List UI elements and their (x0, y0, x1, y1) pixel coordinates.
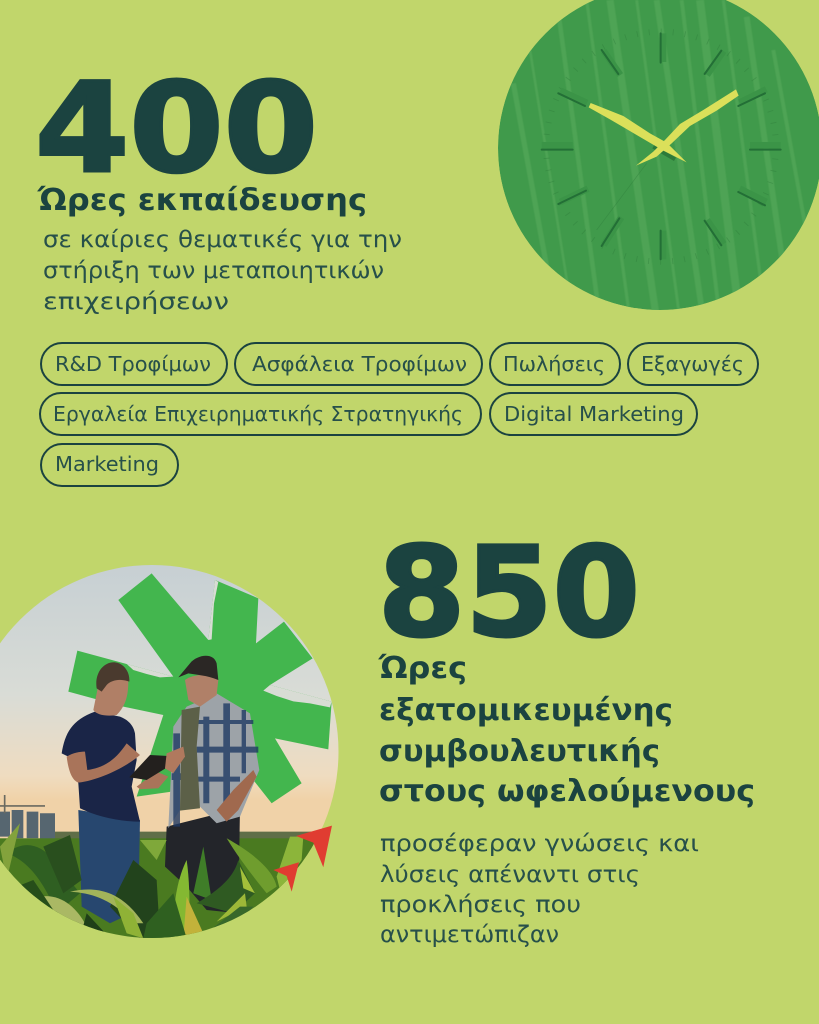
text block: consulting description: προσέφεραν γνώσεις και (380, 831, 699, 857)
icon: clock hands (589, 89, 739, 166)
icon: clock (498, 0, 819, 320)
silos (0, 810, 55, 840)
tag: R&D (41, 343, 227, 385)
text block: consulting description: λύσεις απέναντι στις (380, 862, 640, 888)
text block: consulting description: προκλήσεις που (380, 892, 581, 918)
text block: training description: σε καίριες θεματικές για την (43, 227, 402, 253)
heading: training hours: Ώρες εκπαίδευσης (37, 183, 367, 218)
panel: topic tags (40, 343, 758, 486)
tag: digital marketing (490, 393, 697, 435)
tag: strategy tools (40, 393, 481, 435)
text block: consulting description (380, 831, 699, 948)
tablet (130, 755, 166, 780)
heading: 400: 400 (35, 57, 318, 201)
tag: digital marketing: Digital Marketing (504, 402, 684, 426)
text block: consulting description: αντιμετώπιζαν (380, 922, 559, 948)
icon: red arrows (273, 826, 332, 892)
heading: consulting hours: Ώρες (378, 651, 467, 686)
photo: farmers in corn field (0, 560, 360, 945)
text block: training description (43, 227, 402, 315)
heading: consulting hours: συμβουλευτικής (379, 734, 660, 769)
heading: consulting hours (378, 651, 755, 809)
man one (62, 662, 168, 923)
icon: green asterisk (68, 573, 332, 803)
tag: exports: Εξαγωγές (641, 352, 744, 376)
heading: consulting hours: εξατομικευμένης (379, 693, 673, 728)
tag: food safety (235, 343, 482, 385)
text block: training description: επιχειρήσεων (43, 289, 229, 315)
text block: training description: στήριξη των μεταποιητικών (43, 258, 384, 284)
heading: consulting hours: στους ωφελούμενους (379, 774, 755, 809)
tag: sales: Πωλήσεις (503, 352, 605, 376)
tag: exports (628, 343, 758, 385)
tag: marketing: Marketing (55, 452, 159, 476)
tag: sales (490, 343, 620, 385)
corn leaves (0, 823, 303, 938)
man two (165, 656, 259, 913)
tag: strategy tools: Εργαλεία Επιχειρηματικής Στρατηγικής (53, 402, 463, 426)
tag: R&D: R&D Τροφίμων (55, 352, 211, 376)
heading: 850: 850 (378, 521, 640, 665)
tag: marketing (41, 444, 178, 486)
tag: food safety: Ασφάλεια Τροφίμων (252, 352, 467, 376)
